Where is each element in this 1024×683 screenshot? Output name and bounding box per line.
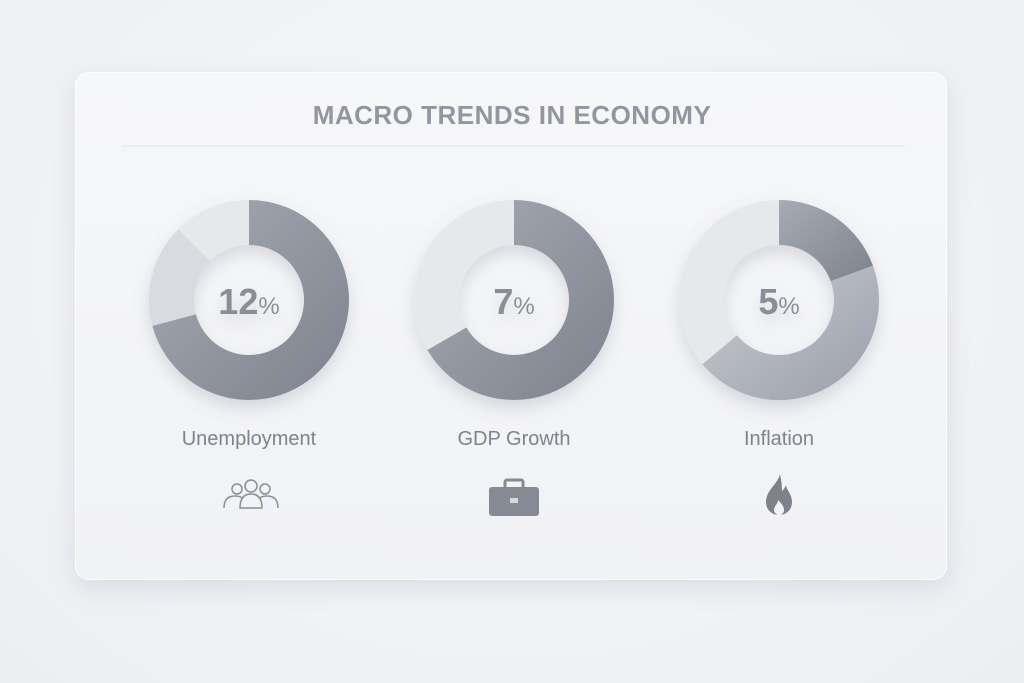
title: MACRO TRENDS IN ECONOMY <box>313 100 711 130</box>
donut: inflation <box>702 200 879 400</box>
icon: flame <box>766 474 792 515</box>
label: unemployment: Unemployment <box>182 428 316 450</box>
donut: GDP growth <box>427 200 614 400</box>
donut: unemployment: 12% <box>218 281 280 322</box>
donut: unemployment <box>149 200 349 400</box>
donut: inflation: 5% <box>758 281 800 322</box>
icon: briefcase <box>489 480 539 516</box>
label: GDP growth: GDP Growth <box>458 428 570 450</box>
icon: people <box>224 480 278 508</box>
card panel <box>75 72 947 580</box>
label: inflation: Inflation <box>744 428 814 450</box>
donut: GDP growth: 7% <box>493 281 535 322</box>
